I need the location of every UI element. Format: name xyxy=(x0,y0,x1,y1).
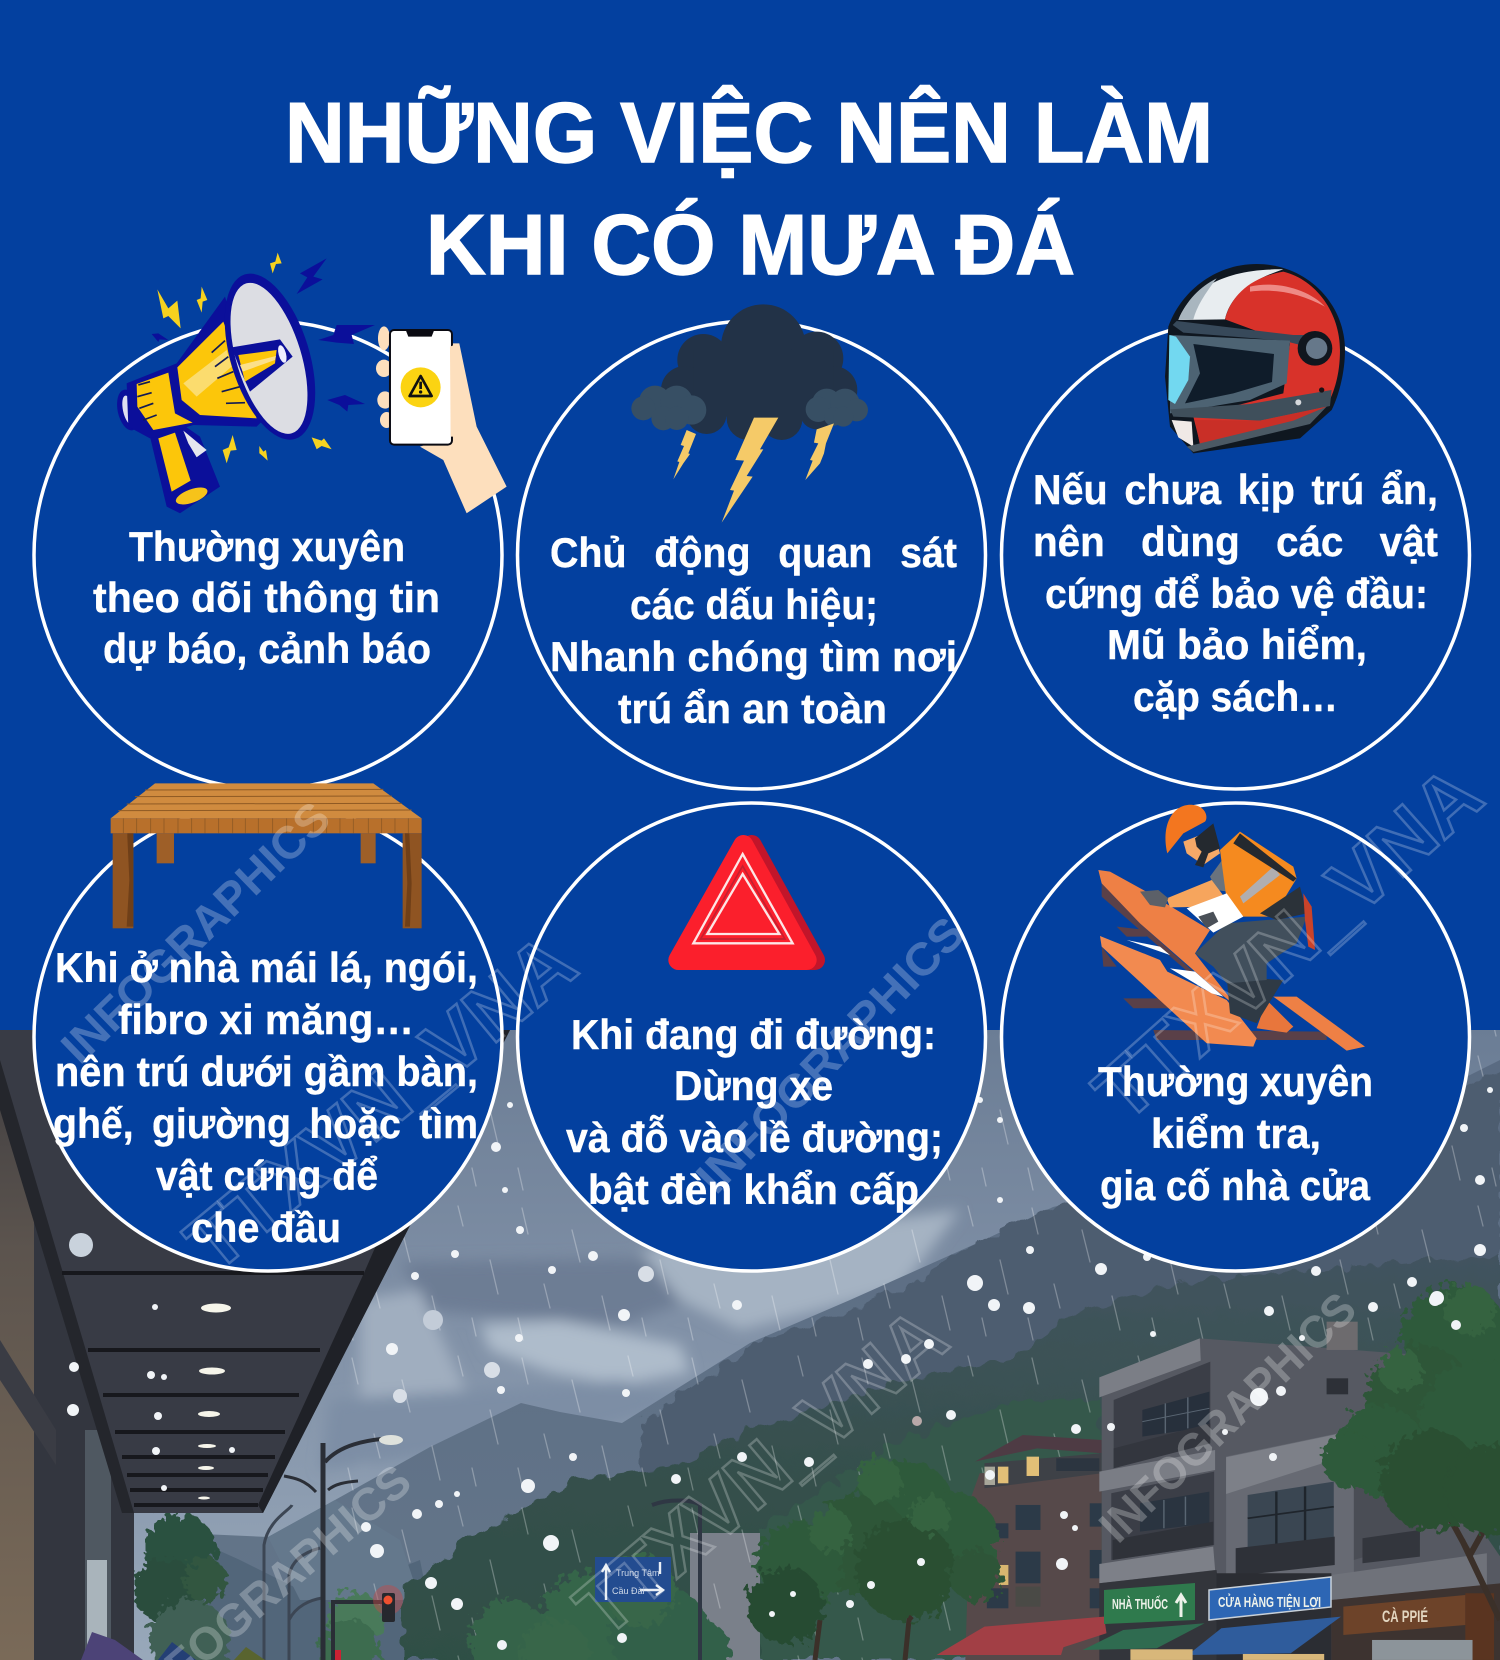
text: bảo vệ đầu: Mũ bảo hiểm, xyxy=(1107,621,1367,668)
forested foreground ridge xyxy=(402,1255,1500,1660)
buildings xyxy=(937,1322,1500,1660)
panel: theo dõi thông tin xyxy=(34,253,507,789)
text: gia cố nhà cửa: kiểm tra, xyxy=(1151,1110,1321,1157)
watermarks: TTXVN_VNA xyxy=(558,1291,963,1653)
icon: roofer worker xyxy=(1098,805,1365,1051)
text: trú dưới gầm bàn: vật cứng để xyxy=(156,1152,378,1199)
text: theo dõi thông tin: theo dõi thông tin xyxy=(93,574,440,621)
text: quan sát dấu hiệu xyxy=(550,529,957,732)
canopy xyxy=(0,1030,510,1513)
text: trú dưới gầm bàn: nên trú dưới gầm bàn, xyxy=(55,1048,478,1095)
foreground trees xyxy=(747,1285,1500,1660)
text: theo dõi thông tin: Thường xuyên xyxy=(129,523,405,570)
text: khi đang đi đường: và đỗ vào lề đường; xyxy=(566,1113,943,1161)
text: theo dõi thông tin: dự báo, cảnh báo xyxy=(103,625,431,672)
text: gia cố nhà cửa: gia cố nhà cửa xyxy=(1100,1162,1371,1209)
background trees behind pole xyxy=(133,1514,730,1660)
traffic light xyxy=(333,1585,403,1660)
icon: wooden table xyxy=(111,783,422,928)
text: quan sát dấu hiệu: Nhanh chóng tìm nơi xyxy=(550,633,957,680)
far mountains xyxy=(180,1060,1500,1660)
text: khi đang đi đường: Khi đang đi đường: xyxy=(571,1011,936,1058)
text: khi đang đi đường: Dừng xe xyxy=(674,1062,833,1109)
watermarks: INFOGRAPHICS xyxy=(686,906,975,1203)
text: trú dưới gầm bàn: ghế, giường hoặc tìm xyxy=(53,1100,478,1147)
icon: helmet xyxy=(1165,264,1345,453)
text: bảo vệ đầu: Nếu chưa kịp trú ẩn, xyxy=(1033,466,1438,513)
title xyxy=(285,85,1213,293)
text: quan sát dấu hiệu: các dấu hiệu; xyxy=(630,581,878,628)
road sign xyxy=(595,1500,700,1660)
shop signs: CỬA HÀNG TIỆN LỢI xyxy=(1218,1593,1321,1611)
text: trú dưới gầm bàn xyxy=(53,944,478,1251)
text: theo dõi thông tin xyxy=(93,523,440,672)
panel: gia cố nhà cửa xyxy=(1002,803,1470,1271)
watermarks: INFOGRAPHICS xyxy=(51,791,340,1073)
icon: warning triangle xyxy=(678,845,815,960)
clouds in sky xyxy=(320,1210,960,1470)
rain streaks xyxy=(330,1030,1500,1660)
text: bảo vệ đầu: cứng để bảo vệ đầu: xyxy=(1045,570,1428,617)
shop fronts xyxy=(937,1593,1494,1660)
watermarks: TTXVN_VNA xyxy=(1077,749,1498,1138)
text: trú dưới gầm bàn: fibro xi măng… xyxy=(118,996,414,1043)
street lamp xyxy=(284,1435,403,1660)
panel: quan sát dấu hiệu xyxy=(518,304,986,789)
panel: khi đang đi đường xyxy=(518,803,986,1271)
far lamp posts xyxy=(264,1505,322,1660)
road sign: Cầu Đài xyxy=(612,1586,645,1596)
text: trú dưới gầm bàn: che đầu xyxy=(191,1204,341,1251)
text: bảo vệ đầu: cặp sách… xyxy=(1133,673,1338,720)
text: quan sát dấu hiệu: trú ẩn an toàn xyxy=(618,685,887,732)
shop building on left xyxy=(0,1030,134,1660)
raincoat figures xyxy=(81,1632,265,1660)
text: khi đang đi đường xyxy=(566,1011,943,1213)
icon: megaphone and phone xyxy=(114,253,507,513)
text: trú dưới gầm bàn: Khi ở nhà mái lá, ngói, xyxy=(55,944,478,991)
text: khi đang đi đường: bật đèn khẩn cấp xyxy=(588,1166,919,1213)
text: gia cố nhà cửa xyxy=(1098,1058,1373,1209)
panel: bảo vệ đầu xyxy=(1002,264,1470,789)
pale building behind trees xyxy=(690,1533,760,1660)
road sign: Trung Tâm xyxy=(616,1568,660,1578)
text: quan sát dấu hiệu: Chủ động quan sát xyxy=(550,529,957,576)
hailstones xyxy=(67,1087,1493,1650)
brown building xyxy=(965,1435,1102,1660)
watermarks xyxy=(51,749,1498,1660)
shop signs xyxy=(1104,1577,1428,1626)
text: bảo vệ đầu xyxy=(1033,466,1438,720)
panel: trú dưới gầm bàn xyxy=(34,783,502,1271)
text: gia cố nhà cửa: Thường xuyên xyxy=(1098,1058,1373,1105)
icon: storm cloud with lightning xyxy=(631,304,868,523)
watermarks: INFOGRAPHICS xyxy=(1089,1282,1366,1552)
title: KHI CÓ MƯA ĐÁ xyxy=(426,198,1075,293)
shop signs: NHÀ THUỐC xyxy=(1112,1595,1168,1613)
grey building xyxy=(1099,1322,1500,1660)
title: NHỮNG VIỆC NÊN LÀM xyxy=(285,85,1213,181)
shop signs: CÀ PPIÉ xyxy=(1382,1607,1428,1626)
background: hailstorm street scene xyxy=(0,1030,1500,1660)
main mountain ridge xyxy=(640,1070,1500,1500)
text: bảo vệ đầu: nên dùng các vật xyxy=(1033,518,1438,565)
watermarks: TTXVN_VNA xyxy=(169,917,592,1288)
